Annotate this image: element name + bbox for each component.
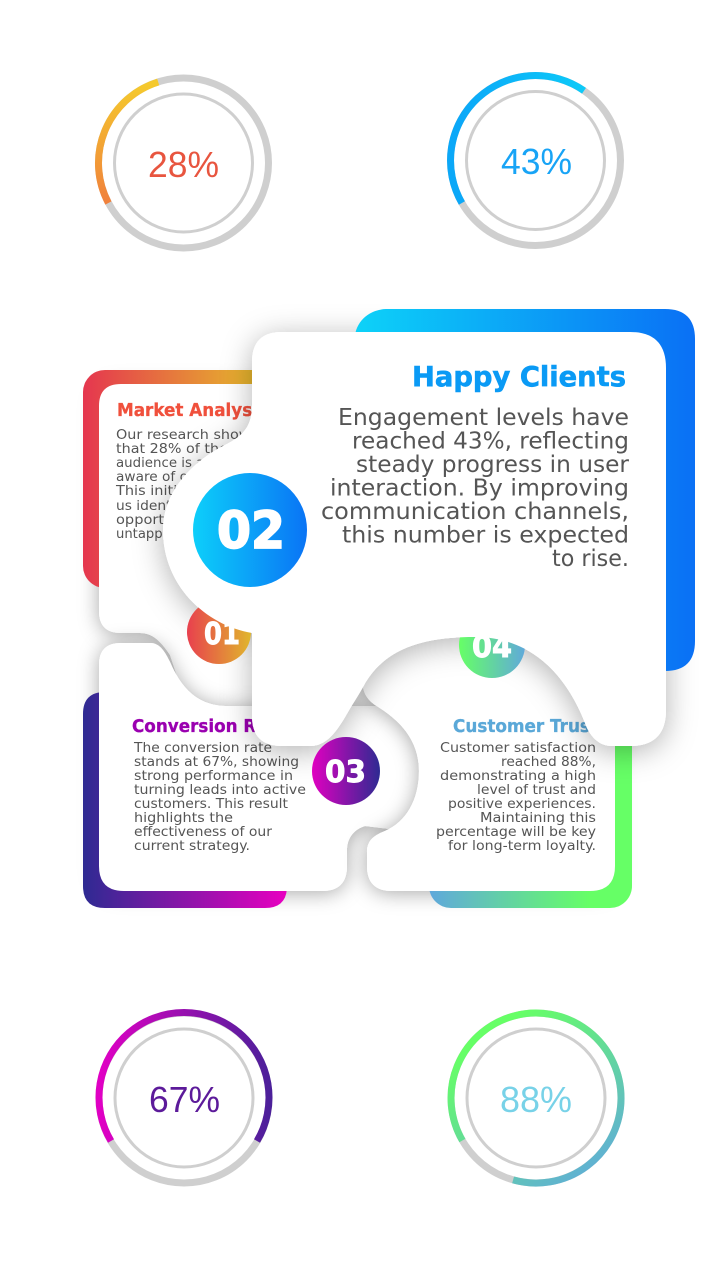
heading: customer trust: Customer Trust <box>453 717 598 737</box>
body text: market analysis: untapped markets. <box>116 527 241 542</box>
body text: conversion rate: stands at 67%, showing <box>134 755 299 770</box>
badge 04: 04 <box>472 630 512 665</box>
body text: happy clients: interaction. By improving <box>330 476 629 502</box>
progress ring: 28%: 28% <box>148 144 219 185</box>
body text: market analysis: opportunities in <box>116 513 231 528</box>
body text: happy clients: reached 43%, reflecting <box>352 428 629 454</box>
body text: conversion rate: effectiveness of our <box>134 825 273 840</box>
panel 03: conversion rate <box>83 643 430 908</box>
body text: market analysis: that 28% of the target <box>116 442 276 457</box>
body text: market analysis: This initial data helps <box>115 484 271 499</box>
body text: customer trust: for long-term loyalty. <box>448 839 596 854</box>
body text: conversion rate <box>133 741 306 854</box>
body text: happy clients <box>321 405 630 572</box>
panel 04: customer trust <box>363 630 632 908</box>
body text: customer trust: reached 88%, <box>501 755 596 770</box>
body text: market analysis: aware of our brand. <box>116 470 251 485</box>
body text: happy clients: Engagement levels have <box>338 405 629 431</box>
progress ring: 67%: 67% <box>149 1079 220 1120</box>
body text: customer trust <box>436 741 596 854</box>
badge 02: 02 <box>217 502 285 561</box>
body text: happy clients: this number is expected <box>342 522 629 548</box>
progress ring: 43% <box>450 76 620 246</box>
body text: conversion rate: highlights the <box>134 811 233 826</box>
body text: conversion rate: strong performance in <box>134 769 293 784</box>
progress ring: 88%: 88% <box>500 1079 572 1120</box>
body text: happy clients: communication channels, <box>321 499 629 525</box>
heading: happy clients: Happy Clients <box>412 360 626 393</box>
body text: market analysis: us identify new <box>116 499 221 514</box>
body text: conversion rate: customers. This result <box>134 797 288 812</box>
body text: market analysis: audience is already <box>116 456 246 471</box>
body text: happy clients: to rise. <box>552 546 629 572</box>
body text: conversion rate: The conversion rate <box>133 741 272 756</box>
progress ring: 88% <box>451 1013 621 1183</box>
body text: customer trust: positive experiences. <box>448 797 596 812</box>
progress ring: 28% <box>98 78 269 248</box>
body text: customer trust: Maintaining this <box>480 811 596 826</box>
panel 02: happy clients <box>163 309 695 746</box>
body text: happy clients: steady progress in user <box>356 452 630 478</box>
body text: market analysis <box>115 428 276 542</box>
body text: conversion rate: current strategy. <box>134 839 250 854</box>
panel 01: market analysis <box>83 370 330 725</box>
progress ring: 43%: 43% <box>501 141 572 182</box>
heading: market analysis: Market Analysis <box>117 401 268 421</box>
badge 04 <box>459 612 525 678</box>
badge 01 <box>187 600 251 664</box>
badge 03 <box>312 737 380 805</box>
body text: customer trust: percentage will be key <box>436 825 596 840</box>
body text: customer trust: demonstrating a high <box>440 769 596 784</box>
badge 02 <box>193 473 307 587</box>
body text: market analysis: Our research shows <box>116 428 258 443</box>
body text: conversion rate: turning leads into active <box>134 783 306 798</box>
badge 03: 03 <box>325 755 366 790</box>
heading: conversion rate: Conversion Rate <box>132 717 287 737</box>
body text: customer trust: level of trust and <box>477 783 596 798</box>
progress ring: 67% <box>99 1012 269 1183</box>
body text: customer trust: Customer satisfaction <box>440 741 596 756</box>
badge 01: 01 <box>204 617 240 652</box>
